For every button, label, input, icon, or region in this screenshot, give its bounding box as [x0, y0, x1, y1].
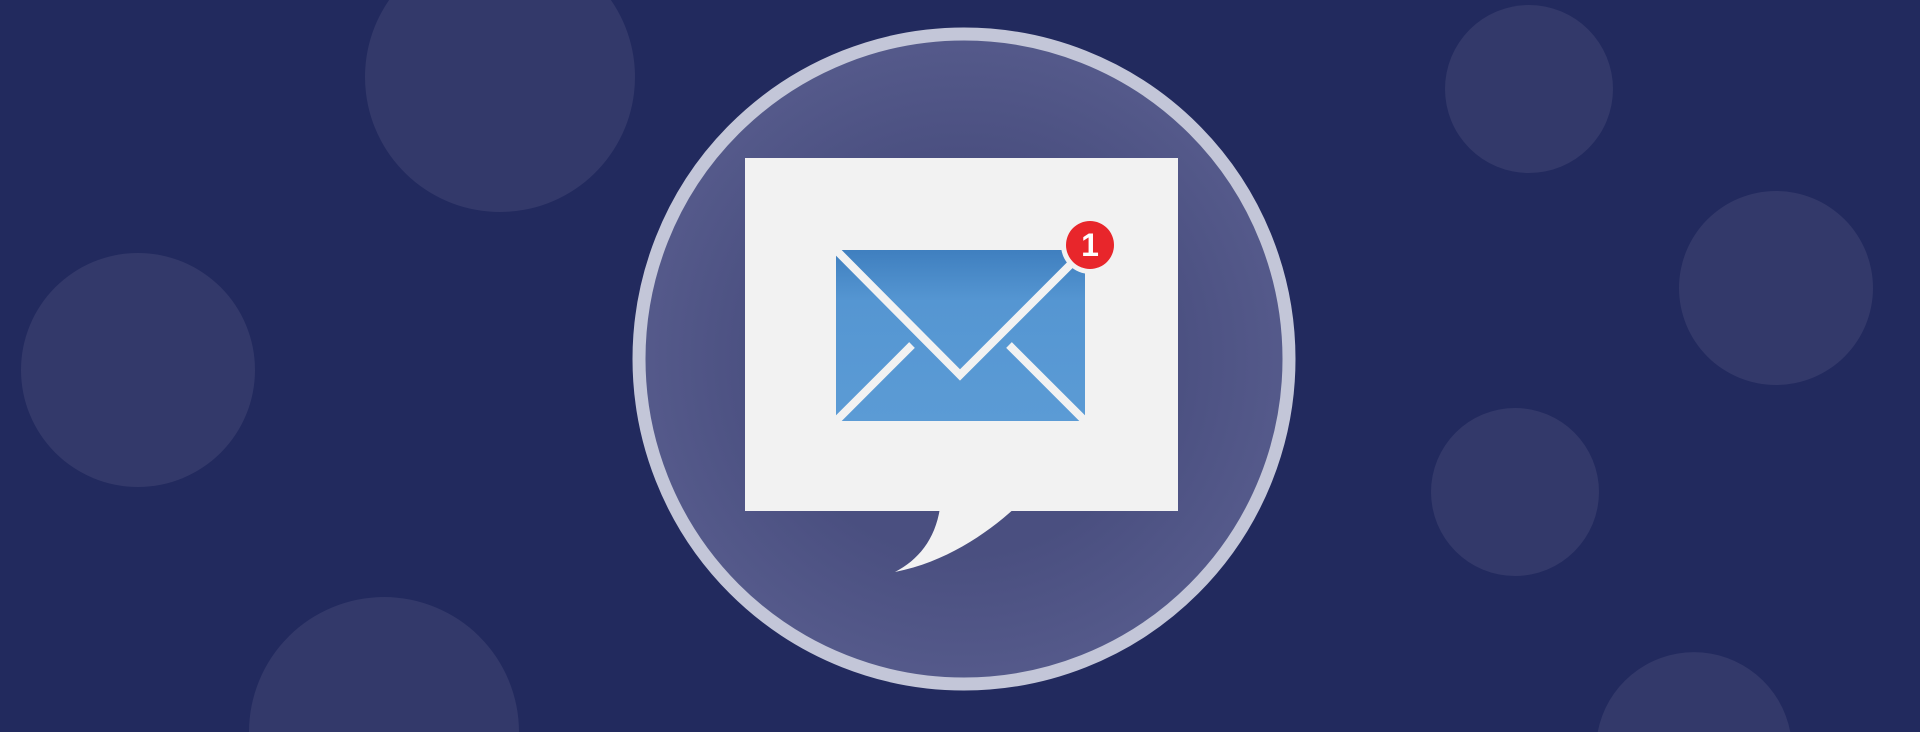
central circle: [639, 34, 1289, 684]
icon: envelope: [836, 250, 1085, 421]
speech bubble: [745, 158, 1178, 572]
icon: notification badge: [1061, 216, 1119, 274]
icon: notification badge: 1: [1081, 227, 1099, 263]
